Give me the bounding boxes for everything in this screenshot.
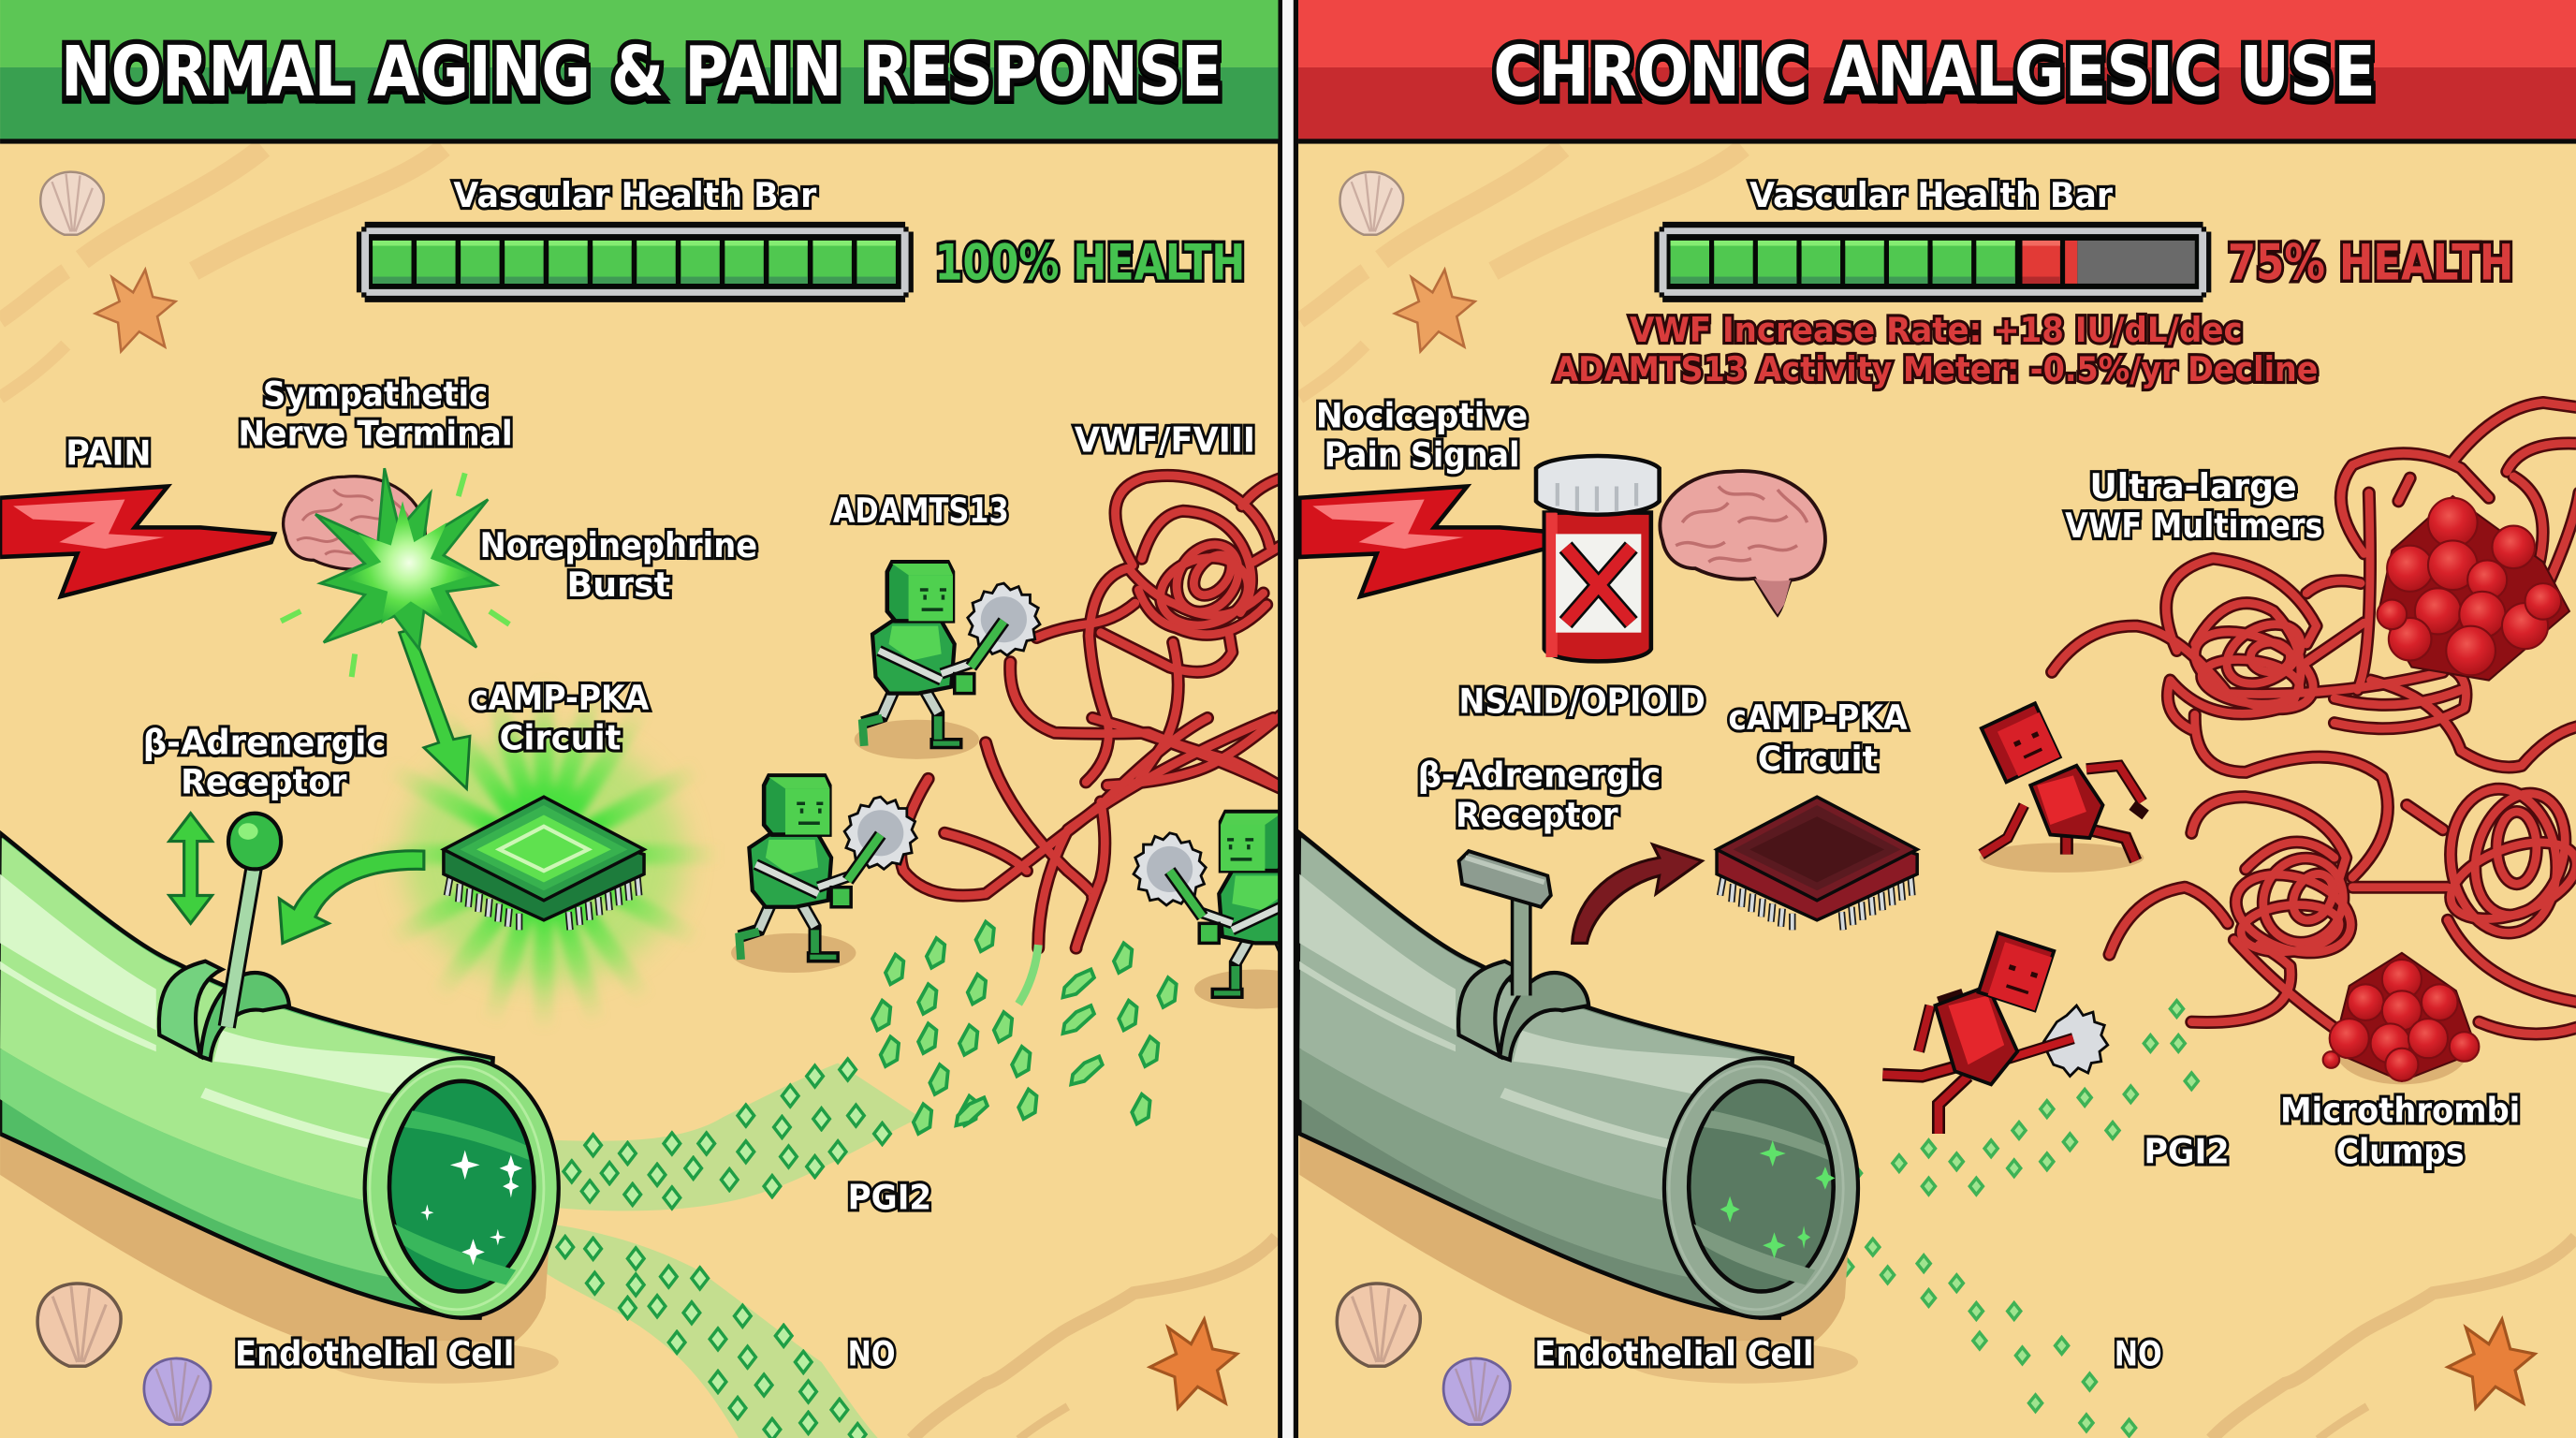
- arrow: receptor to chip, dark red: [1573, 844, 1702, 943]
- icon: brain, right: [1660, 471, 1825, 614]
- label: cAMP-PKA circuit: [470, 678, 650, 757]
- microthrombi clump: [2323, 953, 2479, 1084]
- label: microthrombi clumps: [2280, 1091, 2520, 1172]
- icon: starfish bottom, right panel: [2448, 1319, 2535, 1408]
- icon: starfish top left: [95, 270, 175, 351]
- icon: brain nerve terminal: [281, 475, 427, 571]
- icon: starfish top, right panel: [1395, 270, 1475, 351]
- label: vascular health bar: Vascular Health Bar: [453, 175, 817, 215]
- label: 75% health: 75% HEALTH: [2228, 234, 2513, 291]
- label: NO: NO: [848, 1333, 896, 1373]
- header: normal aging: [0, 0, 1278, 144]
- label: nociceptive pain signal: [1316, 395, 1528, 475]
- icon: norepinephrine burst: [281, 468, 509, 677]
- label: cAMP-PKA circuit: cAMP-PKA: [470, 678, 650, 718]
- label: ultra-large VWF multimers: VWF Multimers: [2065, 506, 2323, 546]
- label: beta-adrenergic receptor: Receptor: [181, 762, 347, 802]
- NO particles: [537, 1247, 857, 1434]
- stat: VWF increase rate: VWF Increase Rate: +18 IU/dL/dec: [1630, 310, 2243, 350]
- health bar: 75 percent: [1654, 222, 2211, 302]
- label: cAMP-PKA circuit, right: [1728, 697, 1908, 779]
- arrow: chip to lever: [279, 851, 424, 943]
- label: endothelial cell: Endothelial Cell: [235, 1333, 514, 1373]
- failing red robot, upper: [1980, 703, 2145, 873]
- ADAMTS13 robot with saw, upper: [855, 562, 1040, 759]
- arrow: burst to chip: [400, 629, 470, 788]
- label: nociceptive pain signal: Pain Signal: [1325, 434, 1519, 475]
- label: norepinephrine burst: Norepinephrine: [480, 525, 757, 565]
- label: sympathetic nerve terminal: [239, 374, 513, 454]
- icon: NSAID opioid bottle: [1536, 456, 1660, 661]
- icon: up-down arrow: [169, 814, 212, 923]
- elongated PGI2 fragments: [970, 983, 1084, 1110]
- health bar: 100 percent: [357, 222, 914, 302]
- label: cAMP-PKA circuit, right: cAMP-PKA: [1728, 697, 1908, 738]
- icon: seashell bottom left: [37, 1284, 121, 1366]
- sparse PGI2 and NO particles: [1847, 1009, 2191, 1428]
- label: norepinephrine burst: Burst: [567, 565, 670, 605]
- icon: stuck receptor lever: [1459, 851, 1551, 996]
- sand ripples right panel: [1299, 148, 2576, 1438]
- icon: starfish bottom right: [1150, 1319, 1237, 1408]
- title right: CHRONIC ANALGESIC USE: [1493, 33, 2376, 112]
- title left: NORMAL AGING & PAIN RESPONSE: [61, 33, 1222, 112]
- ultra-large VWF multimer tangle: [2052, 403, 2576, 1034]
- labels: right panel: [1316, 175, 2520, 1373]
- icon: seashell bottom, right panel: [1337, 1284, 1420, 1366]
- label: cAMP-PKA circuit, right: Circuit: [1758, 739, 1878, 779]
- lumen sparkles, right: [1720, 1140, 1835, 1258]
- icon: purple shell, right panel: [1443, 1358, 1510, 1425]
- large clot: [2378, 496, 2569, 681]
- ADAMTS13 robot with saw, right edge: [1132, 809, 1279, 1009]
- panel: normal aging and pain response: [0, 148, 1319, 1438]
- label: 100% health: 100% HEALTH: [935, 234, 1245, 291]
- cAMP-PKA chip, inactive: [1717, 797, 1917, 930]
- endothelial vessel tube, dull grey-green: [1299, 833, 1858, 1384]
- scattered PGI2 fragments: [883, 936, 1168, 1119]
- label: NSAID/OPIOID: NSAID/OPIOID: [1459, 682, 1705, 722]
- label: nociceptive pain signal: Nociceptive: [1316, 395, 1528, 435]
- icon: receptor lever: [227, 814, 281, 1027]
- label: vascular health bar, right: Vascular Health Bar: [1749, 175, 2114, 215]
- divider between panels: [1278, 0, 1298, 1438]
- label: beta-adrenergic receptor, right: Receptor: [1456, 795, 1619, 835]
- cAMP-PKA chip glowing: [376, 687, 711, 1022]
- label: norepinephrine burst: [480, 525, 757, 605]
- label: VWF/FVIII: VWF/FVIII: [1075, 420, 1255, 461]
- label: endothelial cell, right: Endothelial Cell: [1534, 1333, 1814, 1373]
- icon: purple shell: [144, 1358, 211, 1425]
- green flow NO stream: [534, 1224, 879, 1438]
- endothelial vessel tube, healthy green: [0, 833, 559, 1384]
- lumen sparkles: [420, 1151, 522, 1265]
- label: ultra-large VWF multimers: Ultra-large: [2089, 466, 2297, 506]
- failing red robot with saw, lower: [1882, 932, 2108, 1134]
- label: ultra-large VWF multimers: [2065, 466, 2323, 546]
- header: chronic analgesic: [1298, 0, 2576, 144]
- icon: pain lightning bolt: [0, 486, 274, 596]
- label: beta-adrenergic receptor, right: β-Adrenergic: [1418, 756, 1661, 796]
- panel: chronic analgesic use: [1299, 148, 2576, 1438]
- label: PGI2: PGI2: [848, 1178, 931, 1218]
- ADAMTS13 robot with saw, lower: [731, 775, 916, 973]
- label: beta-adrenergic receptor: β-Adrenergic: [143, 723, 386, 763]
- VWF tangled strands, left: [900, 476, 1281, 1004]
- icon: nociceptive pain bolt: [1299, 486, 1573, 596]
- label: pain: PAIN: [66, 433, 152, 474]
- sand ripples top left: [0, 148, 1277, 1438]
- label: sympathetic nerve terminal: Nerve Terminal: [239, 414, 513, 454]
- label: microthrombi clumps: Microthrombi: [2280, 1091, 2520, 1131]
- labels: left panel: [66, 175, 1255, 1373]
- label: sympathetic nerve terminal: Sympathetic: [263, 374, 488, 414]
- PGI2 particles: [572, 1070, 883, 1197]
- label: microthrombi clumps: Clumps: [2336, 1132, 2465, 1172]
- label: ADAMTS13: ADAMTS13: [833, 491, 1009, 531]
- label: PGI2, right: PGI2: [2144, 1132, 2230, 1172]
- green flow PGI2 stream: [555, 1064, 920, 1211]
- label: cAMP-PKA circuit: Circuit: [500, 717, 621, 757]
- label: beta-adrenergic receptor, right: [1418, 756, 1661, 835]
- icon: seashell top left: [40, 172, 104, 235]
- stat: ADAMTS13 activity meter: ADAMTS13 Activity Meter: -0.5%/yr Decline: [1554, 349, 2318, 389]
- icon: seashell top left, right panel: [1340, 172, 1403, 235]
- label: beta-adrenergic receptor: [143, 723, 386, 802]
- label: NO, right: NO: [2115, 1333, 2162, 1373]
